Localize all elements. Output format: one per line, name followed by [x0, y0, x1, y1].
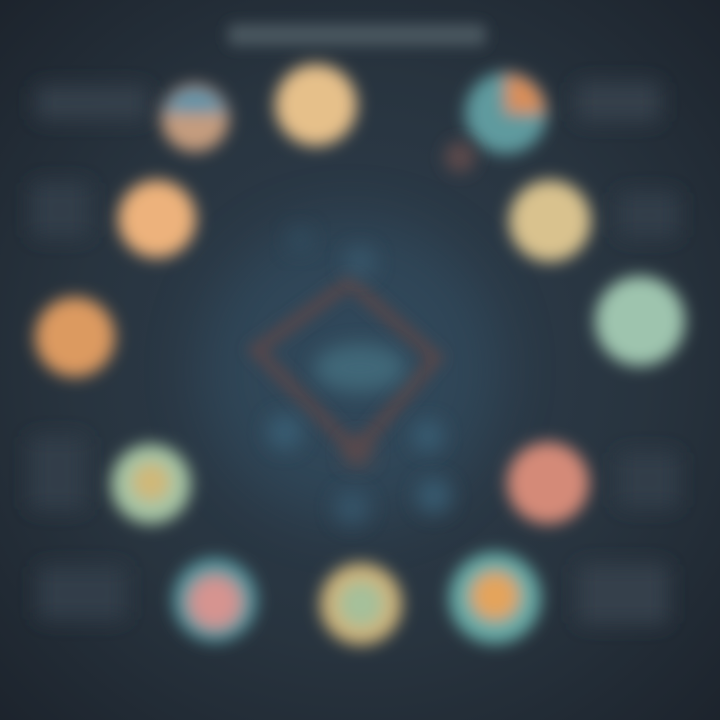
panel: lower left label: [30, 436, 86, 510]
title: [228, 24, 486, 46]
icon: orange circle left: [35, 297, 115, 377]
icon: peach circle: [275, 64, 357, 146]
icon: orange circle upper left: [118, 180, 196, 258]
central diagram: [200, 220, 500, 526]
panel: lower right label: [618, 452, 678, 508]
diamond outline: [256, 282, 436, 452]
central ellipse: [314, 344, 406, 392]
icon: mint circle right: [595, 276, 685, 366]
icon: teal and orange circle: [465, 72, 547, 154]
panel: bottom left label: [38, 566, 126, 620]
icon: yellow-green circle: [320, 563, 402, 645]
small nodes: [267, 414, 303, 450]
panel: upper left label: [36, 86, 148, 120]
icon: salmon circle: [507, 442, 589, 524]
icon: teal and pink circle: [173, 558, 257, 642]
central glow: [200, 220, 500, 520]
panel: upper right label: [576, 82, 660, 122]
panel: left label: [32, 182, 90, 238]
icon: blue and peach circle: [161, 84, 229, 152]
panel: right label: [618, 192, 678, 238]
panel: bottom right label: [578, 564, 668, 624]
icon: pale green circle: [111, 444, 191, 524]
icon: teal and yellow circle: [449, 552, 541, 644]
icon: tan circle upper right: [509, 180, 591, 262]
icon: small brown dot: [444, 141, 476, 173]
